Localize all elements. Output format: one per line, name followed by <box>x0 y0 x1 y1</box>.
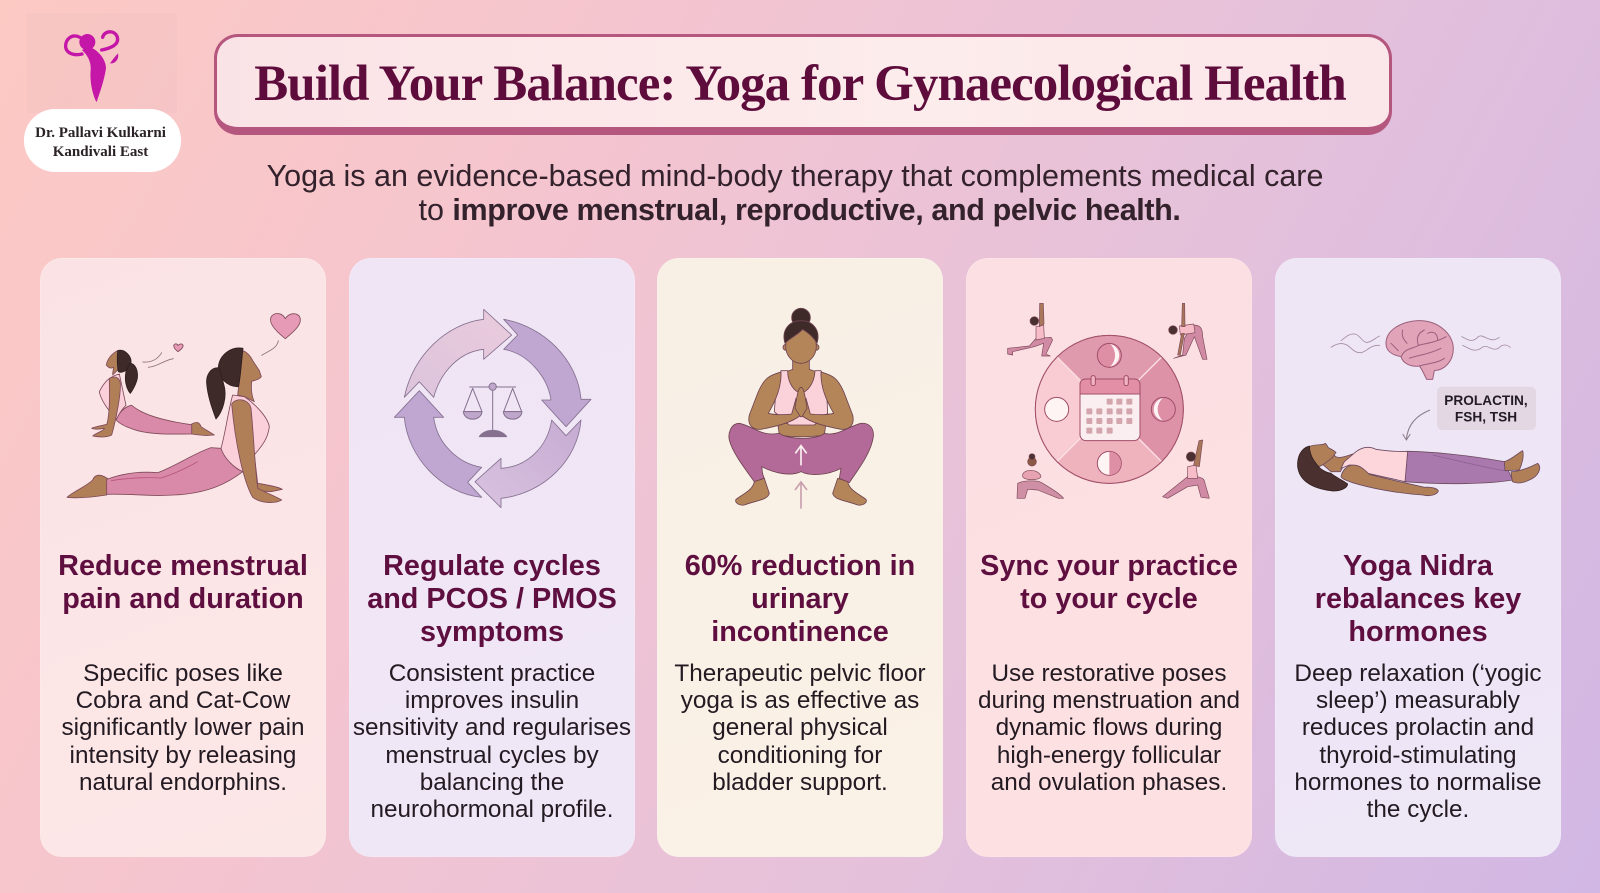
heading: and PCOS / PMOS <box>367 582 617 614</box>
heading: pain and duration <box>62 582 304 614</box>
body text: bladder support. <box>712 769 888 796</box>
body text: thyroid-stimulating <box>1319 742 1517 769</box>
doctor name pill: Kandivali East <box>53 144 148 160</box>
panel: regulate cycles <box>349 258 635 857</box>
heading: incontinence <box>711 616 889 648</box>
heading <box>367 550 617 648</box>
body text <box>353 660 631 823</box>
body text: and ovulation phases. <box>991 769 1227 796</box>
body text: Consistent practice <box>389 660 595 687</box>
body text: Cobra and Cat-Cow <box>76 687 290 714</box>
icon: seated squat with pelvic floor arrows <box>728 308 874 509</box>
body text <box>1294 660 1542 823</box>
body text: sleep’) measurably <box>1316 687 1520 714</box>
body text: Specific poses like <box>83 660 283 687</box>
body text: Deep relaxation (‘yogic <box>1294 660 1542 687</box>
icon: two women in cobra pose <box>66 313 301 503</box>
heading <box>58 550 308 614</box>
panel: yoga nidra <box>1275 258 1561 857</box>
body text: Use restorative poses <box>992 660 1226 687</box>
title banner: Build Your Balance: Yoga for Gynaecological Health <box>254 56 1346 112</box>
panel: urinary incontinence <box>657 258 943 857</box>
hormone label: PROLACTIN, <box>1444 393 1528 408</box>
heading: Yoga Nidra <box>1343 550 1493 582</box>
subtitle: Yoga is an evidence-based mind-body therapy that complements medical care <box>267 159 1323 193</box>
body text: improves insulin <box>405 687 579 714</box>
body text <box>674 660 926 796</box>
body text: yoga is as effective as <box>681 687 919 714</box>
body text: balancing the <box>420 769 564 796</box>
heading: to your cycle <box>1020 582 1198 614</box>
heading <box>685 550 915 648</box>
body text: neurohormonal profile. <box>370 796 614 823</box>
body text: during menstruation and <box>978 687 1240 714</box>
body text <box>61 660 305 796</box>
body text: menstrual cycles by <box>385 742 599 769</box>
body text: conditioning for <box>718 742 882 769</box>
hormone label: FSH, TSH <box>1455 410 1517 425</box>
icon: brain, hormone label and reclining figure <box>1297 320 1540 496</box>
heading: Regulate cycles <box>383 550 601 582</box>
body text: natural endorphins. <box>79 769 287 796</box>
body text: the cycle. <box>1367 796 1469 823</box>
heading: hormones <box>1348 616 1488 648</box>
body text <box>978 660 1240 796</box>
heading: rebalances key <box>1315 582 1521 614</box>
doctor name pill <box>24 109 181 172</box>
doctor name pill: Dr. Pallavi Kulkarni <box>35 125 166 141</box>
title banner <box>214 34 1392 135</box>
icon: uterus silhouette logo <box>64 30 120 102</box>
heading: symptoms <box>420 616 564 648</box>
body text: dynamic flows during <box>996 714 1222 741</box>
body text: high-energy follicular <box>997 742 1221 769</box>
body text: general physical <box>712 714 888 741</box>
body text: hormones to normalise <box>1294 769 1542 796</box>
heading: Sync your practice <box>980 550 1238 582</box>
heading: 60% reduction in <box>685 550 915 582</box>
subtitle: to improve menstrual, reproductive, and pelvic health. <box>418 193 1180 227</box>
icon: cycle arrows with balance scale <box>394 308 592 508</box>
heading: urinary <box>751 582 849 614</box>
hormone label <box>1437 387 1536 430</box>
body text: Therapeutic pelvic floor <box>674 660 926 687</box>
subtitle <box>267 159 1323 227</box>
heading <box>1315 550 1522 648</box>
logo backdrop <box>27 13 177 113</box>
heading <box>980 550 1238 614</box>
body text: reduces prolactin and <box>1302 714 1534 741</box>
logo block <box>24 30 181 172</box>
panel: reduce menstrual pain <box>40 258 326 857</box>
body text: sensitivity and regularises <box>353 714 631 741</box>
body text: intensity by releasing <box>70 742 296 769</box>
icon: cycle wheel with calendar, moons and yoga poses <box>1007 303 1210 499</box>
heading: Reduce menstrual <box>58 550 308 582</box>
body text: significantly lower pain <box>61 714 305 741</box>
panel: sync practice to cycle <box>966 258 1252 857</box>
